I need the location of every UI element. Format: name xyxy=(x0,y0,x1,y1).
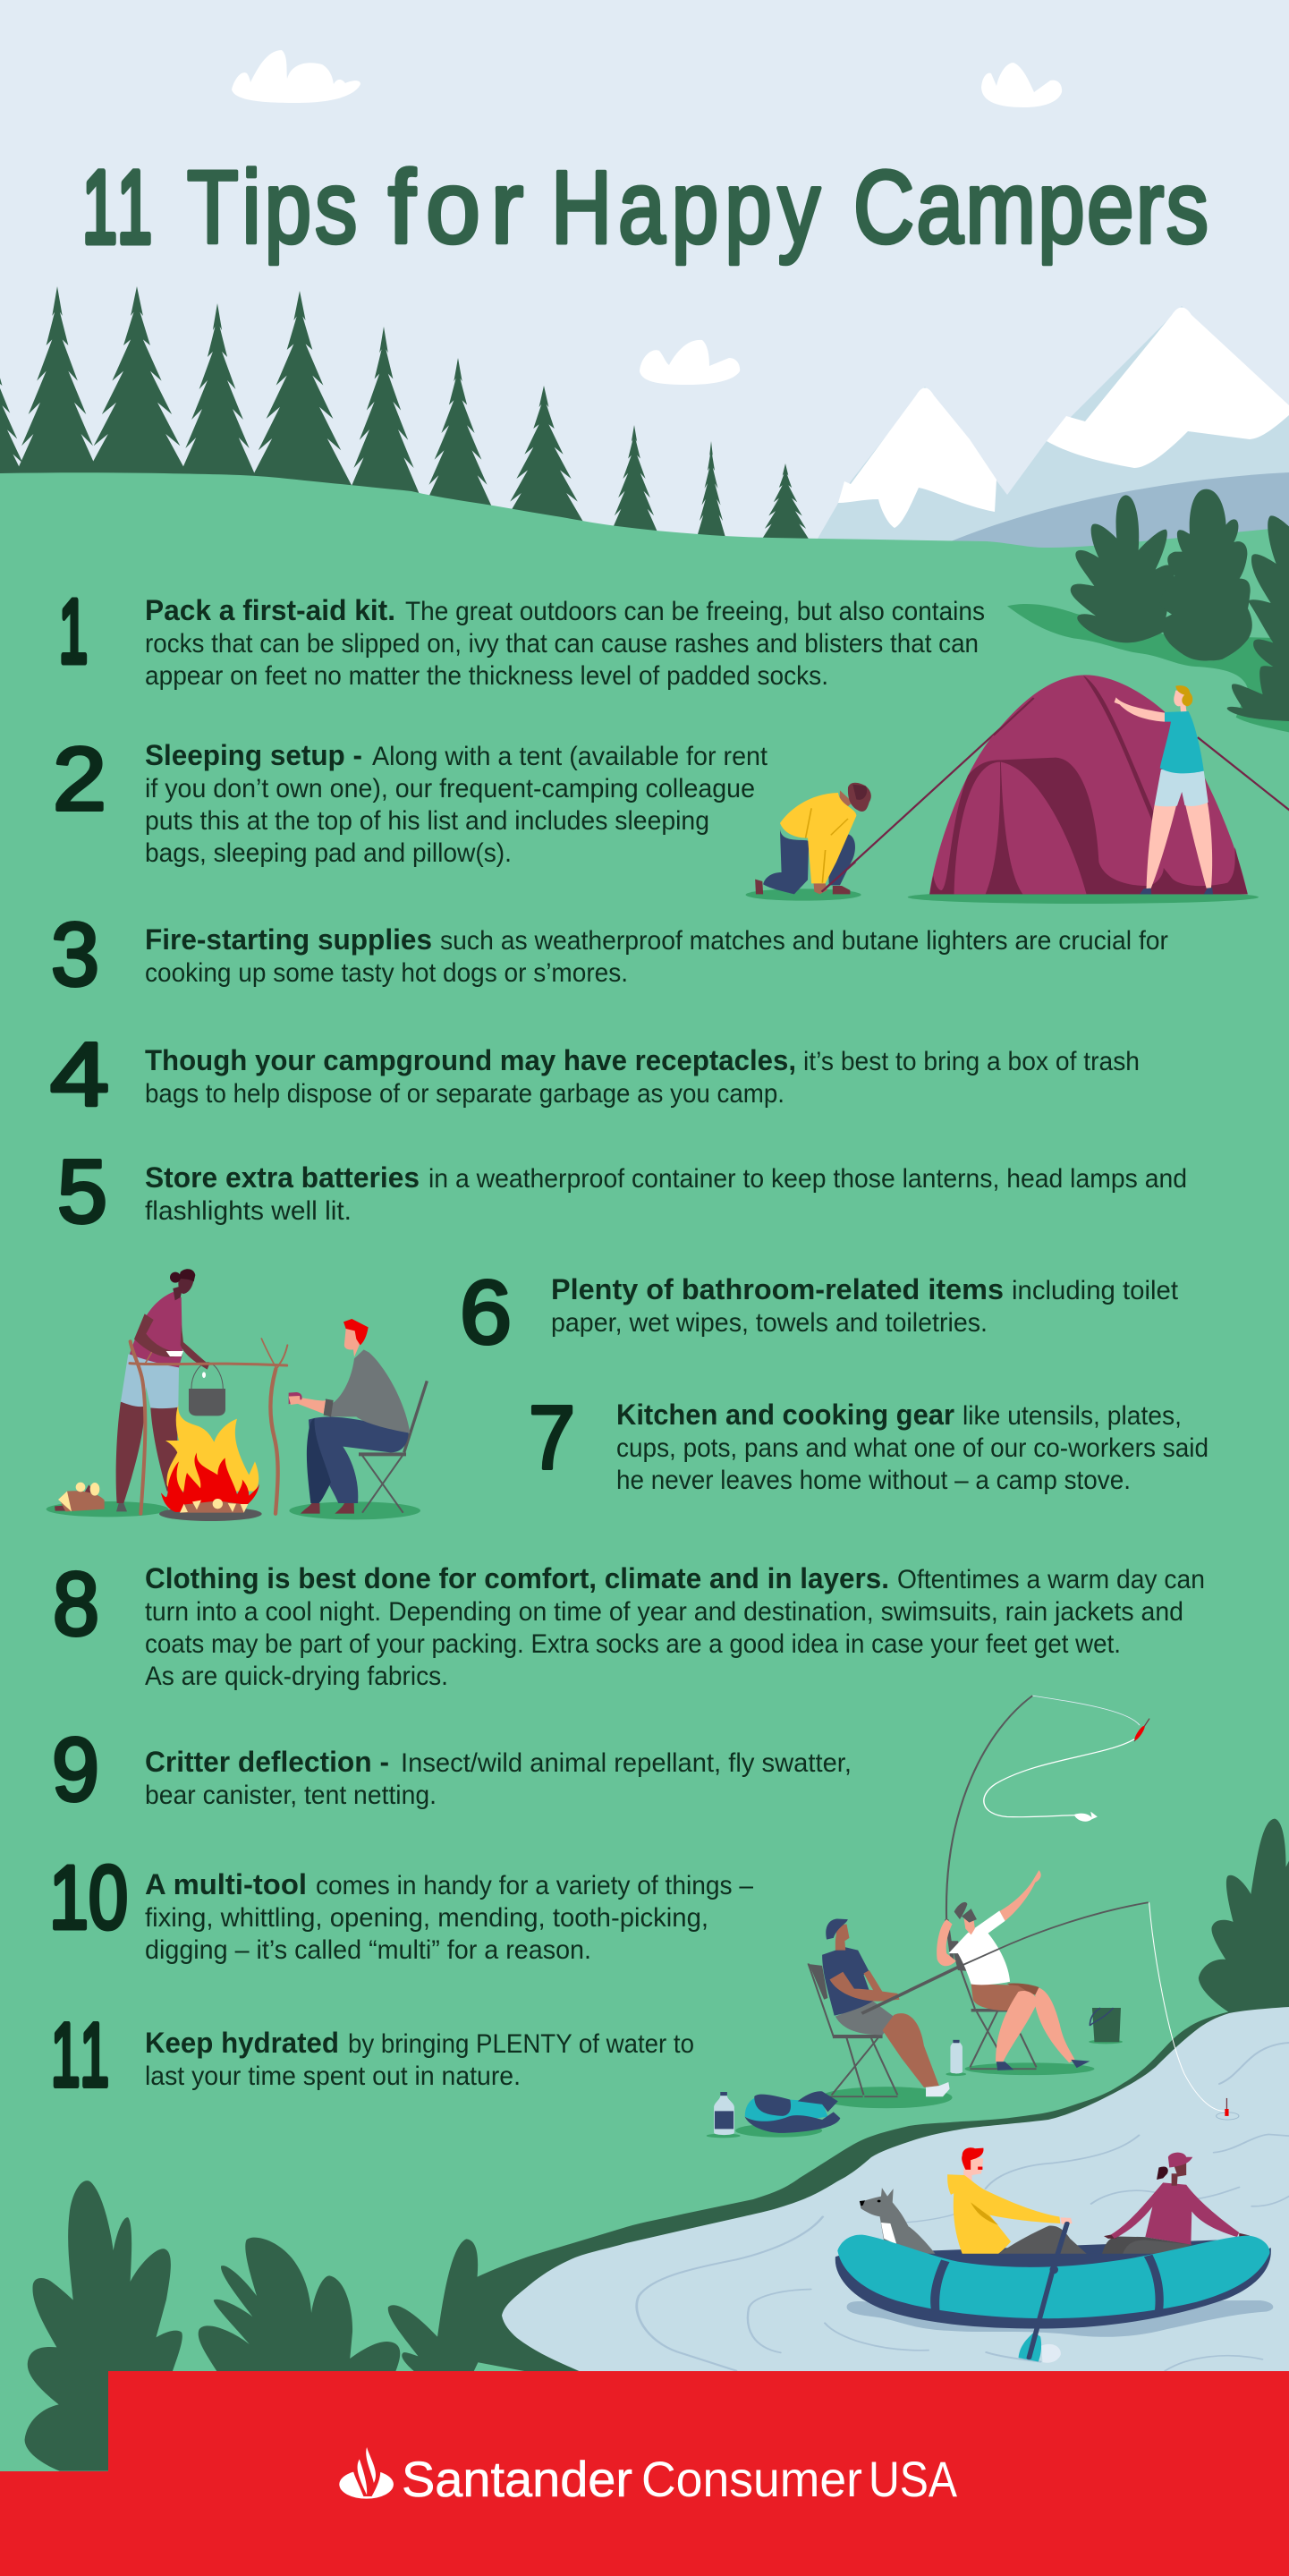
number 11: 11 xyxy=(51,2005,109,2105)
stick frame xyxy=(130,1339,287,1514)
number 8: 8 xyxy=(53,1554,99,1654)
tip 11 text: by bringing PLENTY of water to xyxy=(348,2029,694,2059)
tip 1 xyxy=(59,582,985,691)
raft hull xyxy=(835,2248,1271,2328)
tip 5 text xyxy=(145,1161,1187,1226)
clouds xyxy=(232,50,1062,385)
tip 1 text: The great outdoors can be freeing, but also contains xyxy=(405,597,985,626)
tip 2 text: if you don’t own one), our frequent-camping colleague xyxy=(145,774,755,803)
man in yellow jacket xyxy=(947,2147,1097,2267)
logo wordmark: USA xyxy=(869,2451,958,2507)
tip 5 text: Store extra batteries xyxy=(145,1161,420,1194)
water ripples xyxy=(637,2134,1289,2371)
tip 8 text: As are quick-drying fabrics. xyxy=(145,1662,448,1691)
paddle xyxy=(1019,2223,1067,2363)
tip 3 text: cooking up some tasty hot dogs or s’mores. xyxy=(145,958,628,988)
tent guy ropes xyxy=(822,698,1289,892)
backpack xyxy=(735,2091,840,2138)
tip 2 xyxy=(53,729,768,868)
tip 9 text: Critter deflection - xyxy=(145,1746,389,1778)
title: Happy xyxy=(551,150,820,265)
tip 5 text: flashlights well lit. xyxy=(145,1196,352,1226)
kneeling man xyxy=(755,783,871,894)
tip 1 text xyxy=(145,594,985,691)
logo wordmark xyxy=(402,2451,958,2507)
tip 6 text xyxy=(551,1273,1179,1338)
number 9: 9 xyxy=(52,1720,99,1820)
tip 7 text: like utensils, plates, xyxy=(963,1401,1182,1431)
number 6: 6 xyxy=(460,1262,512,1363)
bottom left bushes xyxy=(25,2181,483,2471)
tip 10 text xyxy=(145,1868,753,1965)
title: Campers xyxy=(853,150,1208,265)
tip 4 text xyxy=(145,1044,1140,1109)
tip 10 xyxy=(49,1848,753,1965)
Santander logo xyxy=(339,2445,958,2507)
snow caps xyxy=(838,388,996,528)
bush C xyxy=(1227,515,1289,721)
tip 11 text xyxy=(145,2027,694,2091)
tip 10 text: fixing, whittling, opening, mending, tooth-picking, xyxy=(145,1903,708,1933)
tip 8 text: coats may be part of your packing. Extra socks are a good idea in case your feet get wet. xyxy=(145,1629,1121,1659)
mountain bodies xyxy=(818,306,1289,555)
bucket xyxy=(1089,2008,1123,2044)
ground shadows xyxy=(47,1501,168,1517)
tip 5 xyxy=(57,1142,1187,1242)
number 4: 4 xyxy=(50,1024,109,1125)
pine tree line xyxy=(0,286,812,544)
tent door shade xyxy=(929,758,1248,894)
title: for xyxy=(388,149,523,265)
tent rope over fabric xyxy=(994,698,1034,735)
tip 1 text: appear on feet no matter the thickness level of padded socks. xyxy=(145,661,828,691)
tip 9 text xyxy=(145,1746,852,1810)
tip 7 xyxy=(529,1388,1208,1495)
mountains xyxy=(818,306,1289,555)
bank outline xyxy=(477,2007,1289,2373)
tip 3 xyxy=(51,905,1168,1005)
tip 1 text: rocks that can be slipped on, ivy that can cause rashes and blisters that can xyxy=(145,629,979,659)
number 2: 2 xyxy=(53,729,106,829)
raft back rim xyxy=(933,2240,1218,2267)
raft shadow xyxy=(847,2300,1273,2337)
tip 2 text: bags, sleeping pad and pillow(s). xyxy=(145,838,512,868)
number 5: 5 xyxy=(57,1142,107,1242)
tip 7 text xyxy=(616,1399,1208,1495)
tip 8 text: turn into a cool night. Depending on time of year and destination, swimsuits, rain jackets and xyxy=(145,1597,1183,1627)
logo wordmark: Consumer xyxy=(641,2451,862,2507)
logo flame icon xyxy=(339,2445,394,2499)
tip 4 text: bags to help dispose of or separate garbage as you camp. xyxy=(145,1079,784,1109)
tip 6 text: Plenty of bathroom-related items xyxy=(551,1273,1004,1305)
tip 4 text: Though your campground may have receptacles, xyxy=(145,1044,796,1076)
fishing rod raised with line and fish xyxy=(946,1696,1149,1960)
raft scene xyxy=(637,2134,1289,2371)
tip 4 xyxy=(50,1024,1140,1125)
tip 7 text: he never leaves home without – a camp stove. xyxy=(616,1466,1131,1495)
tip 2 text: Sleeping setup - xyxy=(145,739,362,771)
tip 3 text: Fire-starting supplies xyxy=(145,923,432,956)
tip 11 text: last your time spent out in nature. xyxy=(145,2062,521,2091)
water bottle near chair xyxy=(946,2040,966,2076)
woman rear seat xyxy=(1099,2153,1250,2262)
bush A xyxy=(1071,495,1175,642)
tent door flaps xyxy=(954,762,1000,894)
water bottle by backpack xyxy=(707,2092,741,2138)
number 3: 3 xyxy=(51,905,99,1005)
number 1: 1 xyxy=(59,582,88,682)
tip 10 text: digging – it’s called “multi” for a reason. xyxy=(145,1935,591,1965)
standing woman xyxy=(1115,685,1213,894)
man with white shirt in chair xyxy=(937,1870,1094,2075)
tip 8 text xyxy=(145,1562,1205,1691)
river and bank xyxy=(25,1819,1289,2471)
number 7: 7 xyxy=(529,1388,575,1488)
tip 4 text: it’s best to bring a box of trash xyxy=(803,1047,1140,1076)
bush B xyxy=(1159,489,1252,660)
log pile xyxy=(55,1483,105,1511)
fishing scene xyxy=(707,1696,1239,2138)
tip 10 text: A multi-tool xyxy=(145,1868,307,1900)
cooking woman xyxy=(116,1269,209,1511)
tip 6 text: including toilet xyxy=(1012,1276,1179,1305)
tip 5 text: in a weatherproof container to keep those lanterns, head lamps and xyxy=(428,1164,1187,1194)
tip 1 text: Pack a first-aid kit. xyxy=(145,594,395,626)
dog xyxy=(860,2188,941,2261)
tip 7 text: Kitchen and cooking gear xyxy=(616,1399,954,1431)
tip 10 text: comes in handy for a variety of things – xyxy=(316,1871,753,1900)
tip 7 text: cups, pots, pans and what one of our co-workers said xyxy=(616,1433,1208,1463)
far blue hill xyxy=(951,472,1289,555)
water xyxy=(502,2007,1289,2373)
tip 8 text: Oftentimes a warm day can xyxy=(897,1565,1205,1594)
tip 2 text: Along with a tent (available for rent xyxy=(372,742,768,771)
title: 11 xyxy=(82,150,152,265)
logo wordmark: Santander xyxy=(402,2451,632,2507)
tip 6 text: paper, wet wipes, towels and toiletries. xyxy=(551,1308,988,1338)
man with blue shirt in chair xyxy=(809,1918,953,2108)
tip 2 text: puts this at the top of his list and includes sleeping xyxy=(145,806,709,836)
right bush above river xyxy=(1199,1819,1289,2021)
tip 9 text: Insect/wild animal repellant, fly swatter, xyxy=(401,1748,852,1778)
tip 9 xyxy=(52,1720,852,1820)
tip 8 text: Clothing is best done for comfort, climate and in layers. xyxy=(145,1562,889,1594)
bush shadow xyxy=(1007,604,1289,732)
cloud middle xyxy=(640,340,740,385)
water ripple upper xyxy=(1219,2043,1289,2084)
cloud left xyxy=(232,50,360,103)
tip 6 xyxy=(460,1262,1179,1363)
tip 3 text: such as weatherproof matches and butane lighters are crucial for xyxy=(440,926,1168,956)
cooking pot xyxy=(189,1363,225,1416)
title: Tips xyxy=(187,150,357,265)
tip 8 xyxy=(53,1554,1205,1691)
fire flames xyxy=(161,1405,259,1513)
tip 11 text: Keep hydrated xyxy=(145,2027,339,2059)
tip 9 text: bear canister, tent netting. xyxy=(145,1781,437,1810)
tent ridge seam xyxy=(1083,676,1155,826)
number 10: 10 xyxy=(49,1848,128,1948)
tip 11 xyxy=(51,2005,694,2105)
bushes upper right xyxy=(1007,489,1289,732)
cloud right xyxy=(981,63,1062,107)
tent body xyxy=(929,675,1248,894)
seated man with mug xyxy=(289,1319,427,1514)
tent scene xyxy=(746,675,1289,904)
ground shadows xyxy=(908,890,1259,904)
title xyxy=(82,149,1208,265)
tip 2 text xyxy=(145,739,768,868)
red footer band xyxy=(0,2371,1289,2576)
second fishing rod with line and float xyxy=(861,1902,1239,2120)
tip 3 text xyxy=(145,923,1168,988)
campfire scene xyxy=(47,1269,427,1521)
